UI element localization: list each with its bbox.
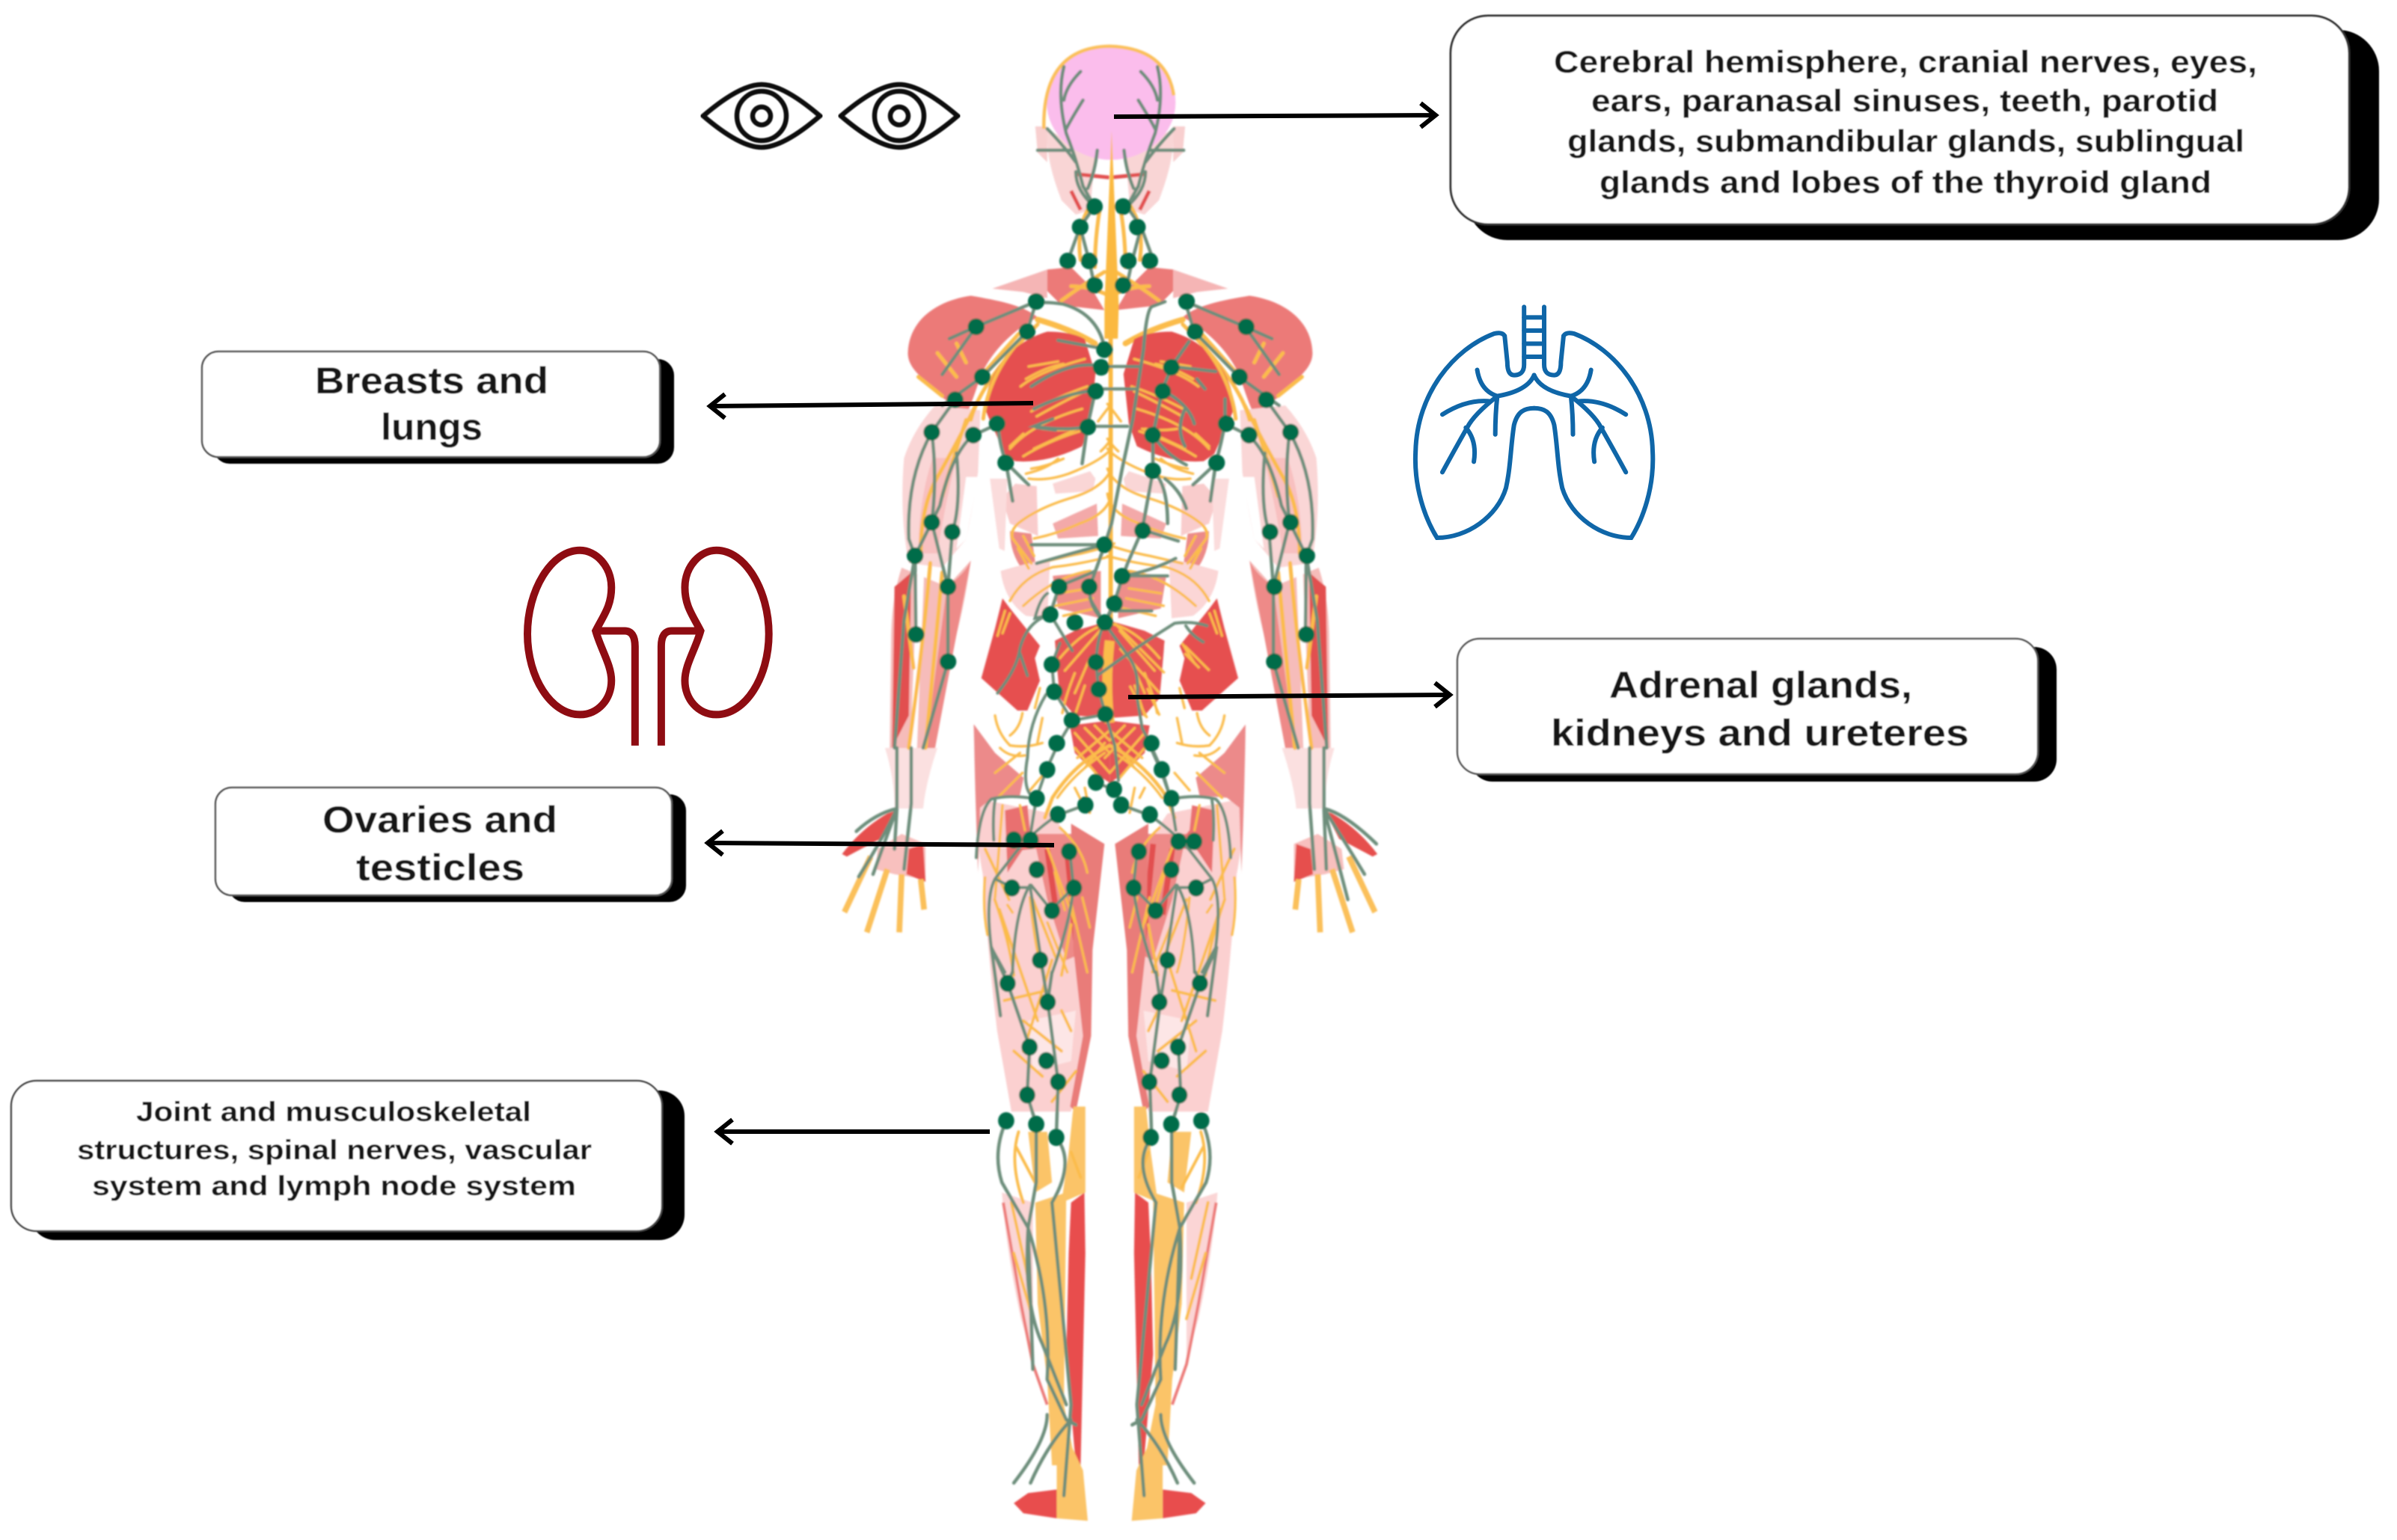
right leg vessels	[1132, 948, 1216, 1496]
upper limb and head lymph vessels	[895, 67, 1327, 748]
central pelvic vessels	[997, 593, 1207, 815]
callout: head and neck structures: glands, submandibular glands, sublingual	[1567, 123, 2244, 159]
callout: head and neck structures	[1451, 16, 2379, 240]
left torso half	[983, 331, 1114, 619]
body figure with lymphatic system	[842, 46, 1377, 1521]
right torso half	[1105, 331, 1236, 619]
left side vessels	[895, 67, 1098, 748]
scalp nerve arc	[1044, 46, 1174, 129]
callout: ovaries and testicles: Ovaries and	[322, 799, 557, 841]
arrow: to breasts callout	[710, 394, 1033, 418]
lower lymph nodes	[1006, 770, 1201, 1138]
upper lymph nodes	[915, 206, 1307, 743]
left pelvis half	[974, 598, 1115, 972]
callout: head and neck structures: glands and lobes of the thyroid gland	[1599, 165, 2211, 200]
right lower half	[1115, 748, 1377, 1521]
torso muscle and nerves	[983, 331, 1236, 623]
right side vessels	[1124, 67, 1327, 748]
arrow: to joints callout	[717, 1120, 990, 1144]
callout: ovaries and testicles: testicles	[356, 847, 524, 889]
callout: joints and musculoskeletal: system and lymph node system	[92, 1171, 576, 1201]
right hand vessels	[1310, 748, 1377, 900]
callout: joints and musculoskeletal	[11, 1081, 685, 1240]
pelvic right strands	[1115, 623, 1210, 718]
icon: eye right	[841, 85, 958, 147]
lower limb lymph vessels	[857, 748, 1377, 1496]
callout: breasts and lungs	[202, 352, 674, 464]
callout: adrenal glands: kidneys and ureteres	[1551, 712, 1969, 754]
spinal cord	[1104, 131, 1118, 339]
pelvis muscle and nerves	[974, 598, 1246, 972]
right kidney	[661, 550, 769, 746]
left leg vessels	[991, 948, 1076, 1496]
callout: head and neck structures: Cerebral hemisphere, cranial nerves, eyes,	[1554, 44, 2257, 79]
left upper half	[890, 126, 1109, 748]
trachea rungs	[1524, 317, 1544, 357]
left kidney	[527, 550, 635, 746]
left thigh vessels	[976, 746, 1085, 972]
callout: joints and musculoskeletal: structures, spinal nerves, vascular	[77, 1135, 592, 1165]
pelvic and thigh lymph vessels	[976, 593, 1231, 972]
callout: joints and musculoskeletal: Joint and musculoskeletal	[136, 1096, 531, 1127]
callout: head and neck structures: ears, paranasal sinuses, teeth, parotid	[1591, 83, 2218, 118]
icon: lungs	[1415, 307, 1653, 538]
callout: adrenal glands: Adrenal glands,	[1609, 664, 1912, 706]
right lung outline	[1534, 307, 1653, 538]
arrow: to adrenal callout	[1128, 683, 1450, 707]
arrow: to head callout	[1114, 103, 1436, 127]
torso lymph vessels	[974, 301, 1249, 622]
left hand vessels	[857, 748, 911, 877]
right upper half	[1111, 126, 1331, 748]
head	[1047, 46, 1175, 160]
lower limbs and hands: muscle and nerves	[842, 748, 1377, 1521]
callout: breasts and lungs: lungs	[381, 406, 483, 448]
right thigh vessels	[1122, 746, 1231, 972]
callout: breasts and lungs: Breasts and	[315, 360, 548, 402]
arrow: to ovaries callout	[708, 831, 1054, 855]
icon: eye left	[703, 85, 820, 147]
central lumbar nerve	[1107, 641, 1109, 723]
callout: adrenal glands	[1457, 639, 2057, 782]
callout: ovaries and testicles	[215, 788, 686, 902]
right pelvis half	[1105, 598, 1246, 972]
left lung outline	[1415, 307, 1534, 538]
spinal nerve trunk	[1105, 337, 1117, 623]
left lower half	[842, 748, 1104, 1521]
upper body muscle and nerves	[890, 46, 1331, 748]
icon: kidneys	[527, 550, 769, 746]
